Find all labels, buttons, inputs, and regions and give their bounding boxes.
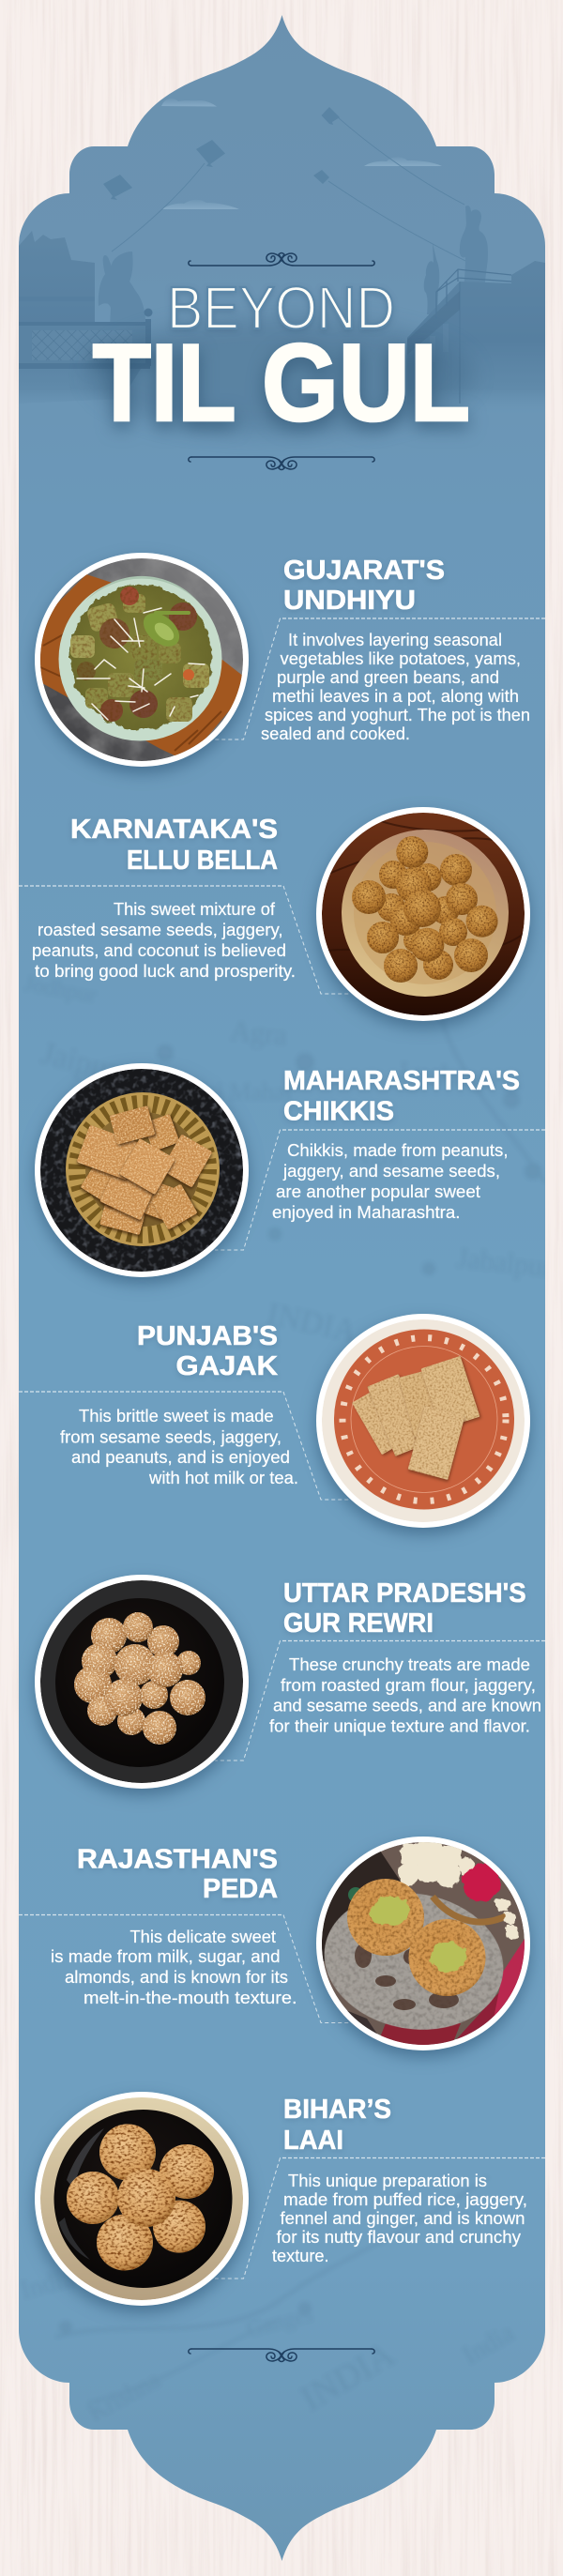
text block: This sweet mixture of [114, 900, 276, 919]
heading [77, 1845, 278, 1904]
section: Maharashtra's Chikkis [35, 1063, 545, 1277]
faded map background: Agra [352, 1142, 401, 1169]
title: BEYOND: BEYOND [167, 274, 395, 342]
text block [261, 631, 530, 743]
text block: from sesame seeds, jaggery, [60, 1428, 282, 1447]
title: TIL GUL: TIL [93, 321, 236, 444]
text block: purple and green beans, and [277, 668, 499, 687]
text block: spices and yoghurt. The pot is then [265, 706, 530, 724]
faded map background: India [458, 2318, 520, 2370]
section: Gujarat's Undhiyu [24, 553, 545, 767]
heading: GUR REWRI [283, 1608, 434, 1639]
text block [272, 2172, 527, 2265]
heading: LAAI [283, 2126, 343, 2156]
right big person silhouette [460, 206, 488, 282]
heading: GUJARAT'S [283, 556, 445, 586]
text block: are another popular sweet [276, 1182, 480, 1201]
heading [137, 1321, 278, 1381]
text block: is made from milk, sugar, and [51, 1947, 280, 1966]
faded map background: Jodhpur [23, 971, 99, 1008]
text block: made from puffed rice, jaggery, [283, 2190, 527, 2209]
heading: KARNATAKA'S [70, 815, 278, 845]
faded map background: Jaipur [38, 1036, 122, 1089]
connector [215, 1130, 545, 1250]
connector [19, 1914, 350, 2023]
heading: GAJAK [176, 1351, 278, 1381]
heading [70, 815, 278, 876]
text block: sealed and cooked. [261, 724, 410, 743]
heading [283, 556, 445, 616]
section: Bihar's Laai [35, 2092, 545, 2306]
heading: RAJASTHAN'S [77, 1845, 278, 1875]
clouds [161, 99, 442, 209]
heading: PUNJAB'S [137, 1321, 278, 1351]
left building [19, 231, 95, 328]
text block [51, 1928, 297, 2007]
section: Punjab's Gajak [19, 1314, 530, 1528]
faded map background: Ganges [244, 2302, 315, 2342]
text block [60, 1407, 298, 1487]
text block [32, 900, 296, 981]
photo: peda on silver plate [313, 1837, 530, 2050]
text block: vegetables like potatoes, yams, [280, 649, 521, 668]
text block: This unique preparation is [288, 2172, 487, 2190]
connector [19, 1392, 350, 1500]
text block: This delicate sweet [129, 1928, 276, 1946]
photo: gajak on terracotta plate [316, 1314, 530, 1528]
text block: almonds, and is known for its [65, 1968, 288, 1987]
section: Rajasthan's Peda [19, 1837, 530, 2050]
heading: UNDHIYU [283, 586, 416, 616]
text block: Chikkis, made from peanuts, [287, 1141, 509, 1160]
title shadow halo [89, 317, 474, 434]
title: TIL GUL: GUL [262, 321, 470, 444]
section: Karnataka's Ellu Bella [19, 807, 530, 1021]
text block: to bring good luck and prosperity. [35, 962, 296, 981]
title: TIL GUL [93, 321, 470, 444]
faded map background: India [18, 2264, 78, 2306]
text block: roasted sesame seeds, jaggery, [38, 921, 283, 939]
text block: for its nutty flavour and crunchy [277, 2228, 521, 2247]
faded map background [62, 1047, 540, 2333]
text block: This brittle sweet is made [79, 1407, 274, 1425]
photo: undhiyu bowl [24, 553, 252, 767]
ornament: top flourish [189, 253, 374, 266]
text block: for their unique texture and flavor. [269, 1717, 530, 1736]
connector [215, 2158, 545, 2279]
connector [19, 886, 350, 994]
text block: These crunchy treats are made [289, 1655, 530, 1674]
text block: peanuts, and coconut is believed [32, 941, 286, 960]
heading [283, 2095, 391, 2156]
heading: MAHARASHTRA'S [283, 1066, 520, 1096]
text block: and sesame seeds, and are known [273, 1697, 541, 1715]
faded map background: INDIA [264, 1297, 360, 1349]
title [89, 274, 474, 444]
heading [283, 1066, 520, 1126]
faded map background: Lucknow [398, 1057, 500, 1094]
text block: melt-in-the-mouth texture. [84, 1989, 297, 2007]
faded map background: INDIA [295, 2334, 402, 2419]
text block: It involves layering seasonal [288, 631, 502, 649]
heading: PEDA [203, 1874, 278, 1904]
left balcony [19, 308, 152, 393]
kites and strings [103, 107, 469, 263]
text block: methi leaves in a pot, along with [272, 687, 519, 706]
heading: ELLU BELLA [127, 846, 278, 876]
faded map background: Krishna [84, 2366, 165, 2426]
small person silhouette [424, 243, 439, 314]
text block: fennel and ginger, and is known [280, 2209, 525, 2228]
heading: UTTAR PRADESH'S [283, 1578, 526, 1608]
text block [269, 1655, 541, 1736]
photo: ellu bella plate [316, 807, 530, 1021]
faded map background: Taj Mahal [192, 1078, 292, 1105]
text block: from roasted gram flour, jaggery, [281, 1676, 536, 1695]
text block: with hot milk or tea. [148, 1469, 298, 1487]
ornament: bottom flourish [189, 2349, 374, 2361]
heading [283, 1578, 526, 1639]
connector [215, 1640, 545, 1761]
text block: and peanuts, and is enjoyed [71, 1448, 290, 1467]
photo: laai on black plate [35, 2092, 249, 2306]
ornament: lower title flourish [189, 457, 374, 469]
text block: texture. [272, 2247, 328, 2265]
section: Uttar Pradesh's Gur Rewri [35, 1575, 545, 1789]
photo: gur rewri on black bowl [35, 1575, 249, 1789]
heading: BIHAR’S [283, 2095, 391, 2125]
rooftop kite scene [19, 99, 545, 422]
left person silhouette [99, 252, 145, 328]
right building [407, 261, 545, 404]
text block: jaggery, and sesame seeds, [282, 1162, 500, 1181]
connector [215, 618, 545, 739]
faded map background: Agra [229, 1015, 288, 1051]
text block: enjoyed in Maharashtra. [272, 1203, 460, 1222]
heading: CHIKKIS [283, 1096, 394, 1126]
photo: chikkis on brass plate [35, 1063, 249, 1277]
text block [272, 1141, 509, 1222]
faded map background: Jabalpur [455, 1242, 554, 1284]
